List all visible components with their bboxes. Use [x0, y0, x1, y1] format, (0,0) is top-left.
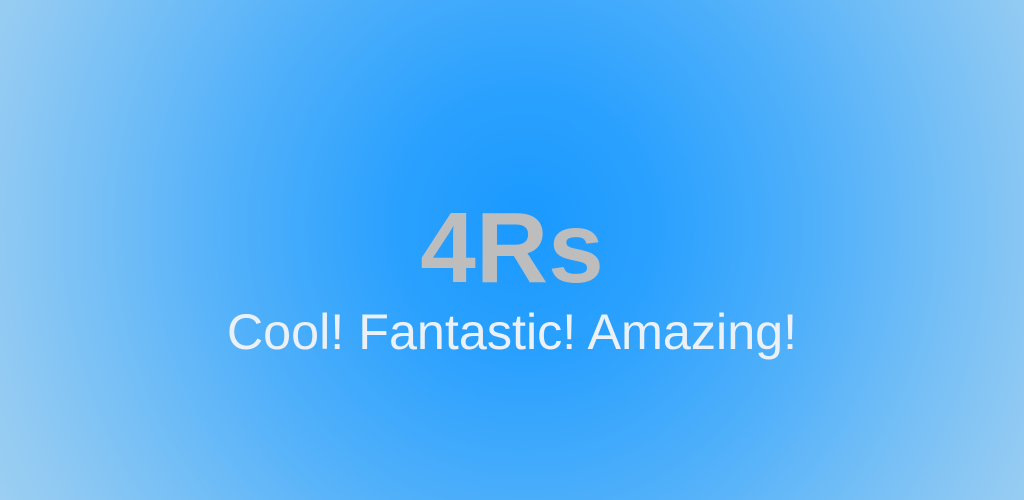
subtitle: Cool! Fantastic! Amazing!: [227, 303, 797, 360]
title: 4Rs: [420, 192, 604, 304]
